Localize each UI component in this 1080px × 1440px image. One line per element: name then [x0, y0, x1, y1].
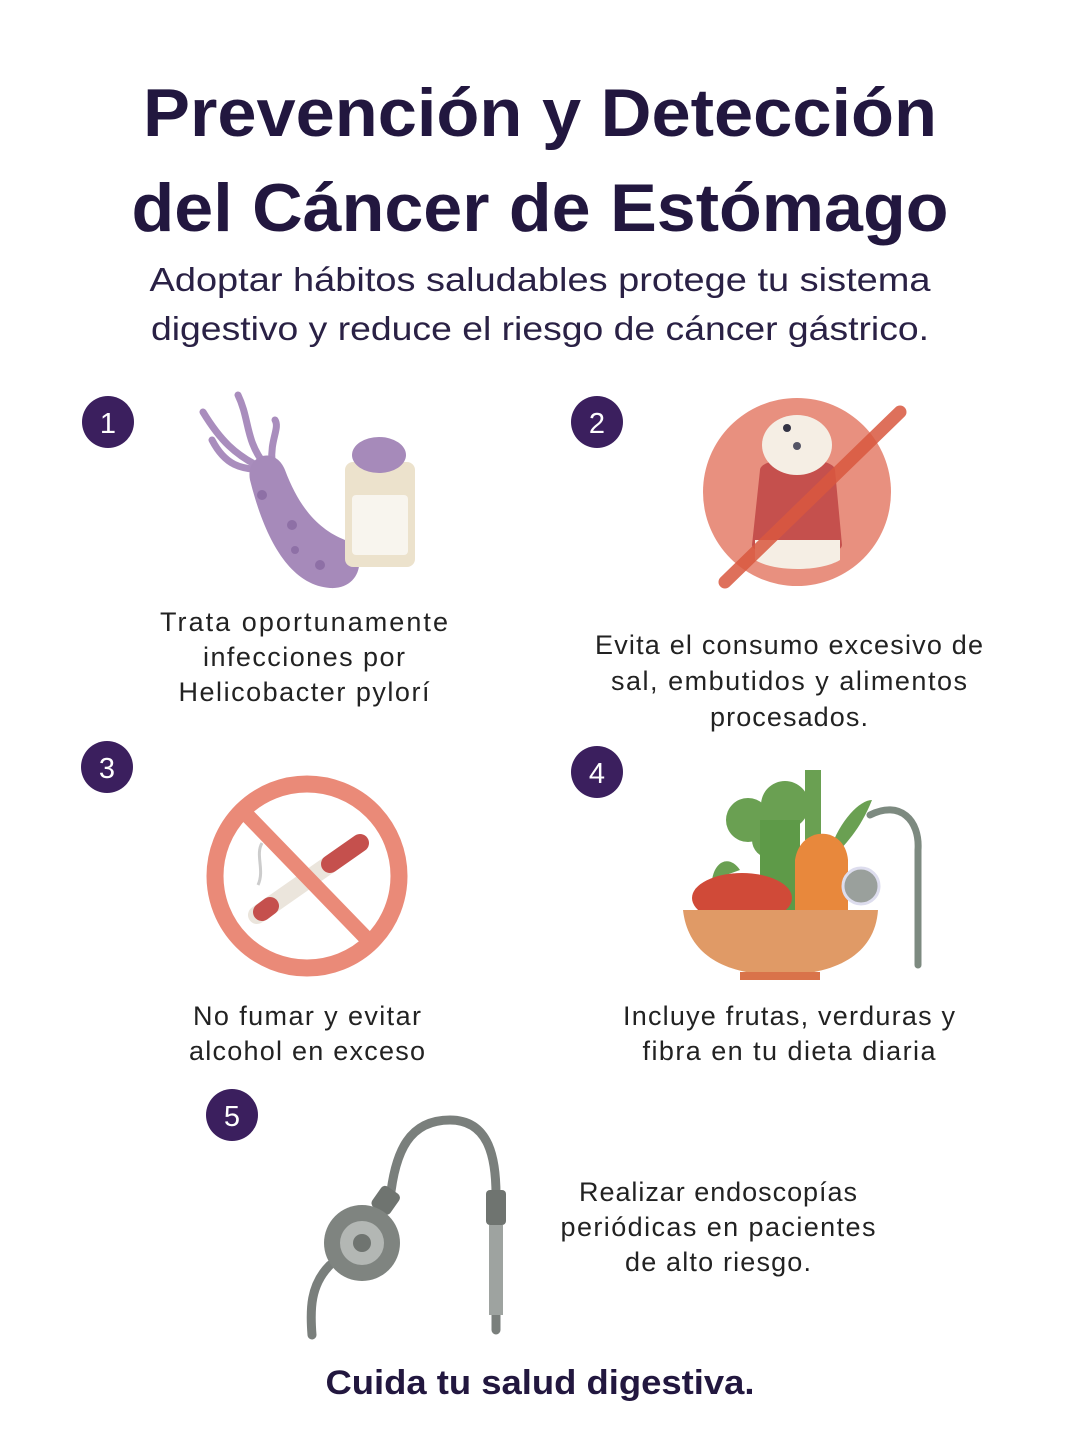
- text 1: [160, 607, 448, 707]
- icon: salt shaker prohibited: [703, 398, 900, 586]
- badge 4: 4: [589, 758, 605, 790]
- badge 1: 1: [100, 408, 116, 440]
- footer: Cuida tu salud digestiva.: [326, 1364, 754, 1402]
- text 4: [623, 1001, 956, 1066]
- text 1: infecciones por: [203, 642, 405, 672]
- badge 1: [82, 396, 134, 448]
- badge 3: 3: [99, 753, 115, 785]
- badge 2: [571, 396, 623, 448]
- icon: endoscope: [311, 1120, 506, 1335]
- title: Prevención y Detección: [143, 75, 937, 151]
- badge 5: 5: [224, 1101, 240, 1133]
- badge 2: 2: [589, 408, 605, 440]
- title: [132, 75, 949, 246]
- text 5: Realizar endoscopías: [579, 1177, 857, 1207]
- text 3: [189, 1001, 425, 1066]
- subtitle: Adoptar hábitos saludables protege tu sistema: [150, 261, 931, 298]
- icon: vegetable bowl: [683, 770, 918, 980]
- title: del Cáncer de Estómago: [132, 170, 949, 246]
- subtitle: [150, 261, 931, 347]
- text 1: Trata oportunamente: [160, 607, 448, 637]
- icon: bacteria and salt shaker: [203, 395, 415, 588]
- badge 4: [571, 746, 623, 798]
- text 4: Incluye frutas, verduras y: [623, 1001, 956, 1031]
- badge 3: [81, 741, 133, 793]
- text 4: fibra en tu dieta diaria: [642, 1036, 936, 1066]
- text 5: de alto riesgo.: [625, 1247, 811, 1277]
- text 5: [560, 1177, 876, 1277]
- text 2: [595, 630, 983, 732]
- icon: no smoking: [215, 784, 399, 968]
- text 3: No fumar y evitar: [193, 1001, 421, 1031]
- text 3: alcohol en exceso: [189, 1036, 425, 1066]
- text 2: procesados.: [710, 702, 868, 732]
- text 2: sal, embutidos y alimentos: [611, 666, 967, 696]
- badge 5: [206, 1089, 258, 1141]
- subtitle: digestivo y reduce el riesgo de cáncer gástrico.: [151, 310, 929, 347]
- text 1: Helicobacter pylorí: [178, 677, 430, 707]
- text 5: periódicas en pacientes: [560, 1212, 876, 1242]
- text 2: Evita el consumo excesivo de: [595, 630, 983, 660]
